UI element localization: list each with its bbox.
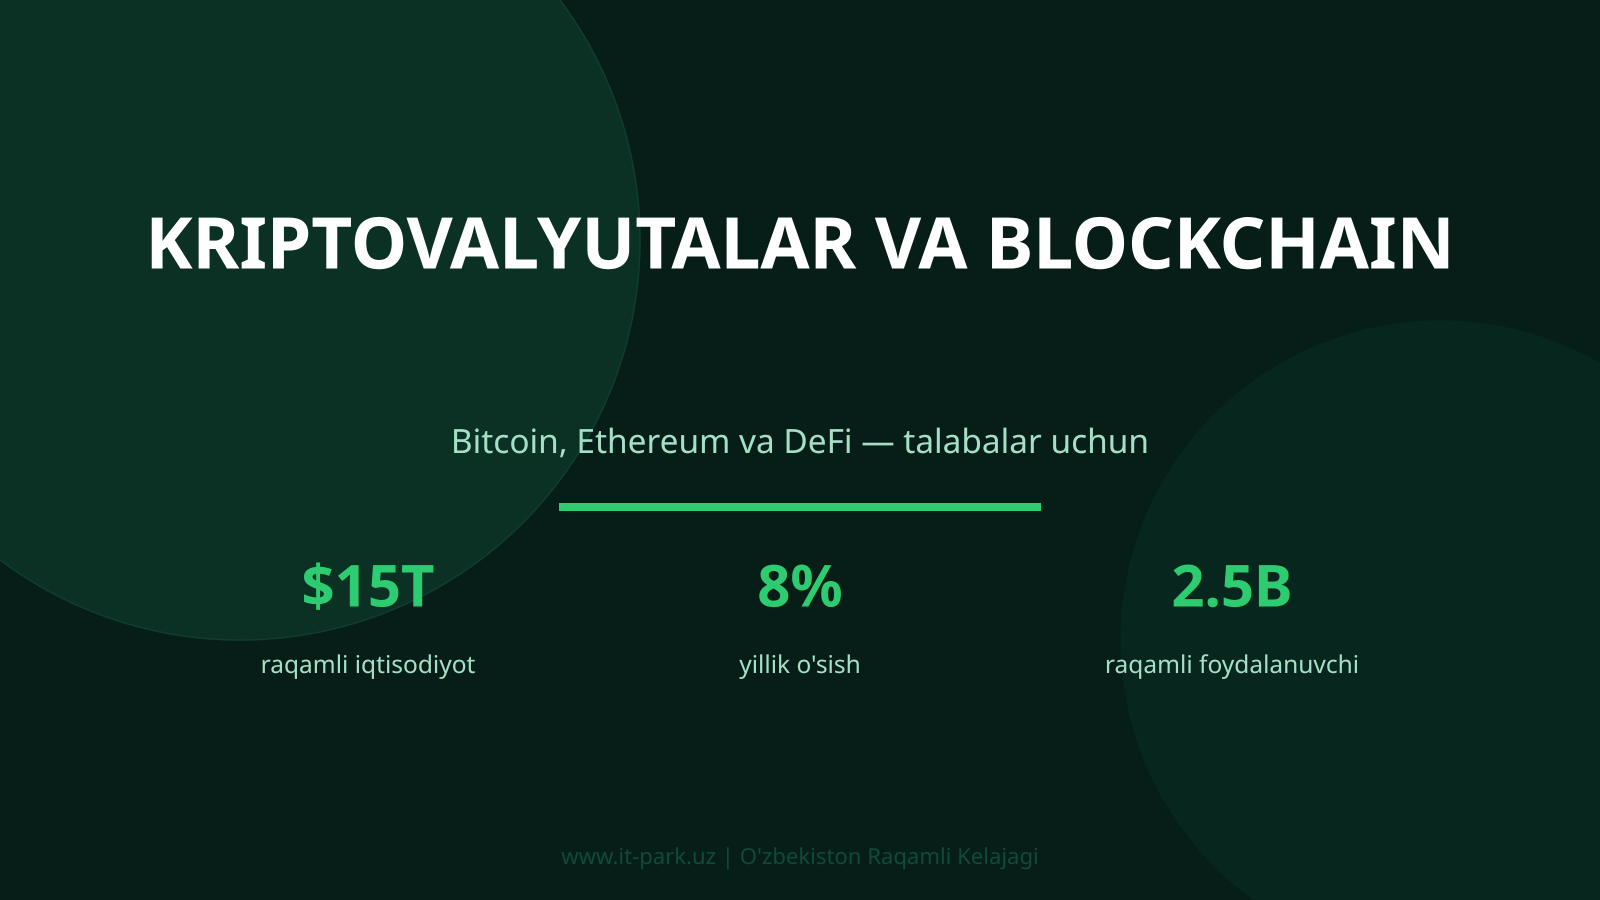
subtitle: Bitcoin, Ethereum va DeFi — talabalar uchun [451,417,1149,463]
stat value: 2.5B: 2.5B [1171,544,1293,624]
stat value: 8%: 8% [757,544,843,624]
stat: digital economy [261,544,476,681]
title: KRIPTOVALYUTALAR VA BLOCKCHAIN [145,192,1455,290]
stat label: annual growth: yillik o'sish [739,648,861,681]
footer: www.it-park.uz | O'zbekiston Raqamli Kelajagi [561,841,1039,871]
stat value: $15T: $15T [302,544,434,624]
stat label: digital users: raqamli foydalanuvchi [1105,648,1359,681]
decorative circle: bottom right [1120,320,1600,900]
stat: digital users [1105,544,1359,681]
stat: annual growth [739,544,861,681]
decorative circle: top left [0,0,640,640]
stat label: digital economy: raqamli iqtisodiyot [261,648,476,681]
accent divider bar [559,503,1041,511]
